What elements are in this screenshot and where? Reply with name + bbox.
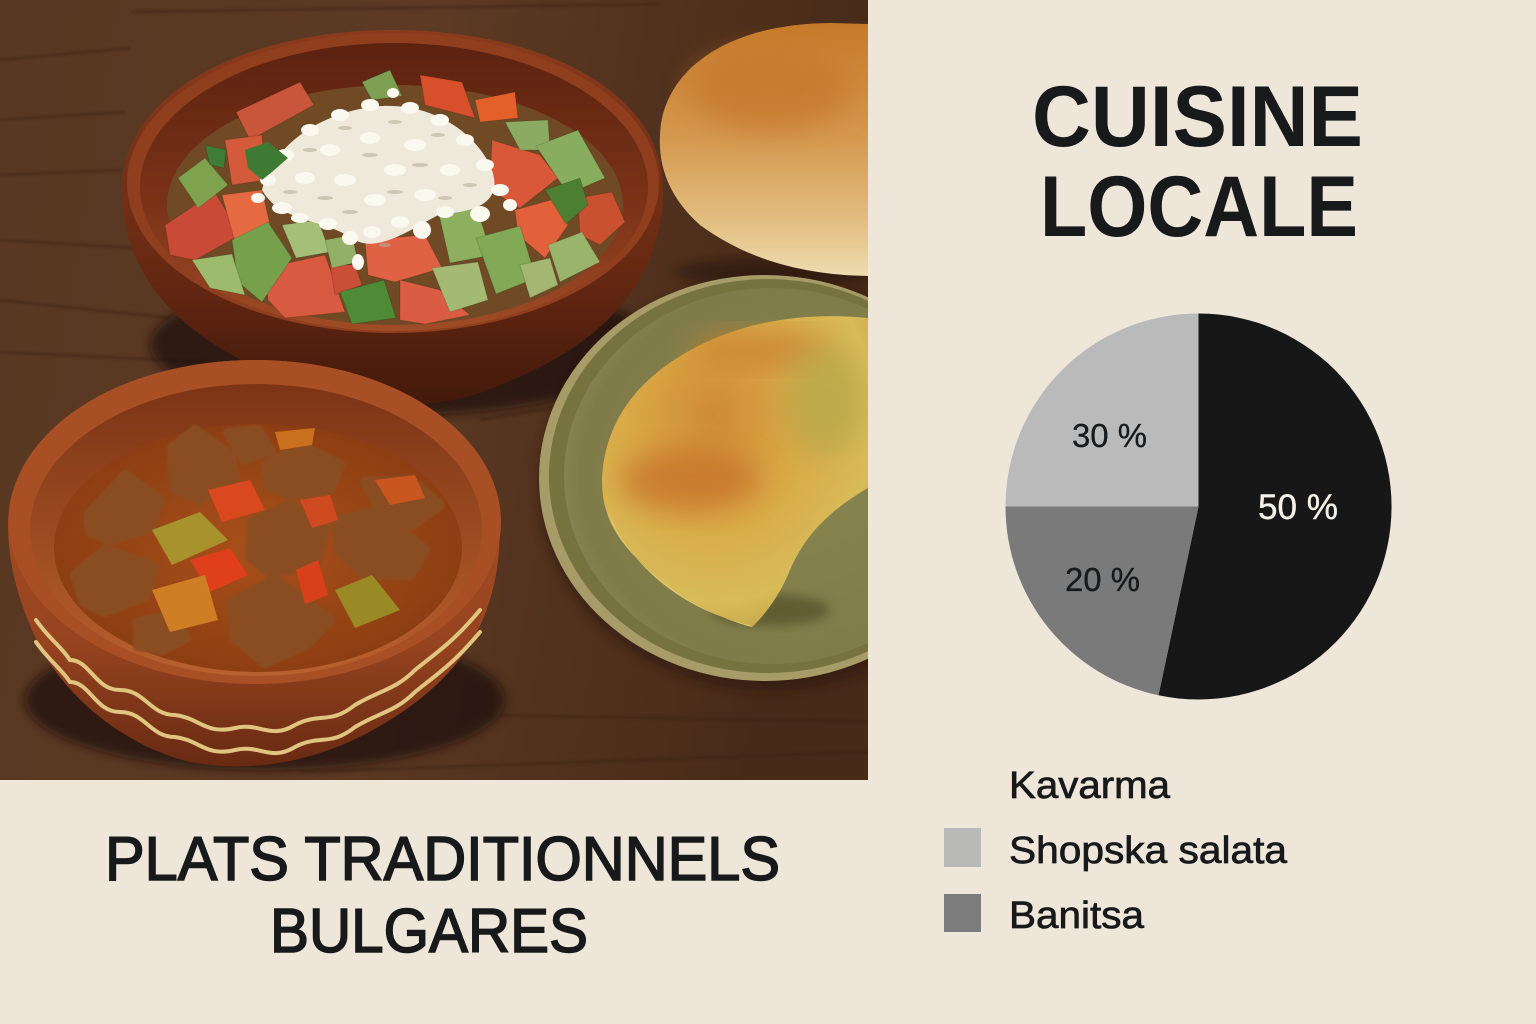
shopska salad	[165, 70, 625, 325]
stew bowl	[8, 360, 505, 770]
wooden table	[0, 0, 868, 780]
banitsa pastry	[602, 316, 868, 627]
title: cuisine locale	[1032, 69, 1363, 255]
slice: kavarma 50 %	[1158, 314, 1392, 700]
green plate	[536, 275, 868, 692]
label 50 %: 50 %	[1258, 488, 1338, 527]
caption line two: BULGARES	[270, 897, 588, 966]
legend item: kavarma: Kavarma	[1009, 765, 1171, 807]
kavarma stew	[54, 424, 462, 672]
salad bowl	[122, 30, 663, 415]
label 30 %: 30 %	[1072, 417, 1147, 454]
legend swatch: banitsa	[944, 894, 981, 932]
legend item: shopska salata: Shopska salata	[1009, 830, 1288, 872]
title line one: CUISINE	[1032, 69, 1363, 165]
crumbled white cheese	[251, 88, 517, 270]
legend	[944, 765, 1288, 937]
pie chart	[1006, 313, 1392, 700]
wavy decoration	[36, 610, 480, 753]
bottom caption: plats traditionnels bulgares	[105, 825, 780, 966]
legend item: banitsa: Banitsa	[1009, 895, 1145, 937]
legend swatch: shopska salata	[944, 828, 981, 867]
slice: shopska salata 30 %	[1006, 313, 1198, 506]
caption line one: PLATS TRADITIONNELS	[105, 825, 780, 894]
food photograph panel	[0, 0, 868, 780]
slice: banitsa 20 %	[1006, 506, 1198, 695]
title line two: LOCALE	[1040, 159, 1358, 255]
label 20 %: 20 %	[1065, 561, 1140, 598]
bread roll	[660, 23, 875, 286]
parsley leaf	[245, 142, 288, 180]
